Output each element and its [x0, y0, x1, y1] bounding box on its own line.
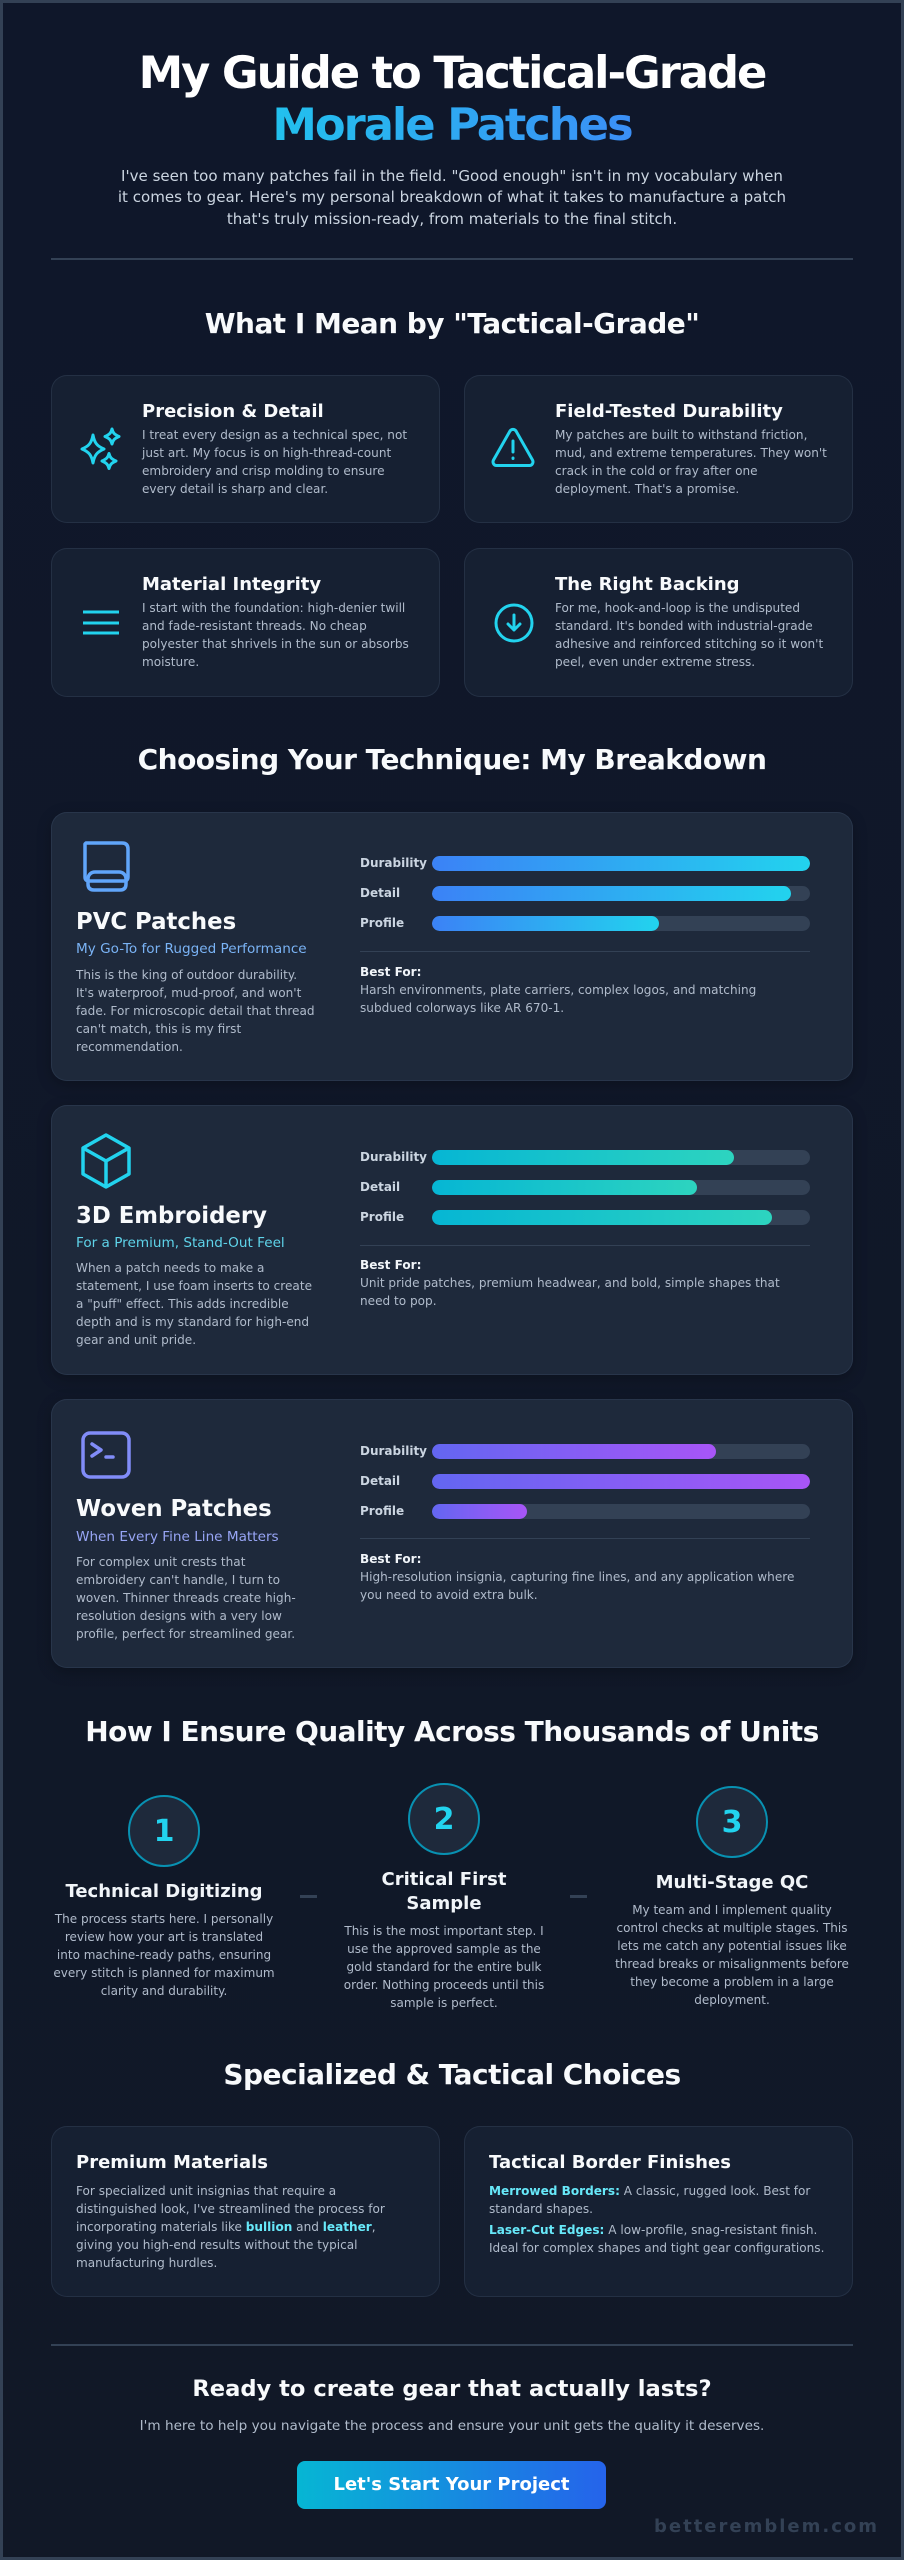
text: standard shapes.	[489, 2202, 593, 2216]
text	[555, 574, 823, 669]
panel: tactical border finishes	[464, 2126, 853, 2297]
text	[555, 401, 827, 496]
step text	[344, 1924, 544, 2010]
description: woven. Thinner threads create high-	[76, 1591, 296, 1605]
step text: My team and I implement quality	[632, 1903, 832, 1917]
step text	[53, 1912, 275, 1998]
text: just art. My focus is on high-thread-count	[142, 446, 391, 460]
best for: Unit pride patches, premium headwear, and bold, simple shapes that	[360, 1276, 780, 1290]
connector	[570, 1895, 587, 1898]
icon: cube	[81, 1133, 131, 1189]
icon: PVC	[83, 841, 130, 892]
panel: 3D embroidery	[51, 1105, 853, 1375]
title	[139, 46, 766, 151]
panel: material integrity	[51, 548, 440, 697]
description	[76, 968, 315, 1054]
bar chart: Durability	[360, 1444, 427, 1458]
step text: review how your art is translated	[65, 1930, 263, 1944]
description: embroidery can't handle, I turn to	[76, 1573, 280, 1587]
intro paragraph	[118, 167, 786, 228]
step text: lets me catch any potential issues like	[617, 1939, 847, 1953]
bar chart: Detail	[360, 1474, 400, 1488]
bar chart	[360, 1444, 810, 1519]
step title	[382, 1869, 506, 1914]
intro paragraph: that's truly mission-ready, from materials to the final stitch.	[227, 210, 677, 228]
text: peel, even under extreme stress.	[555, 655, 755, 669]
description: It's waterproof, mud-proof, and won't	[76, 986, 301, 1000]
bar chart: Profile	[360, 1504, 404, 1518]
step text: control checks at multiple stages. This	[616, 1921, 848, 1935]
intro paragraph: I've seen too many patches fail in the field. "Good enough" isn't in my vocabulary when	[121, 167, 783, 185]
text: polyester that shrivels in the sun or absorbs	[142, 637, 409, 651]
panel: PVC patches	[51, 812, 853, 1081]
subtitle: When Every Fine Line Matters	[76, 1529, 279, 1545]
text	[142, 574, 409, 669]
text: crack in the cold or fray after one	[555, 464, 758, 478]
text: For specialized unit insignias that require a	[76, 2184, 336, 2198]
description: depth and is my standard for high-end	[76, 1315, 309, 1329]
text: adhesive and reinforced stitching so it won't	[555, 637, 823, 651]
description: This is the king of outdoor durability.	[76, 968, 297, 982]
text	[142, 401, 407, 496]
text: I start with the foundation: high-denier twill	[142, 601, 405, 615]
text: Laser-Cut Edges: A low-profile, snag-resistant finish.	[489, 2223, 817, 2237]
text: and fade-resistant threads. No cheap	[142, 619, 367, 633]
step text	[615, 1903, 849, 2007]
best for	[360, 1258, 780, 1308]
step text: The process starts here. I personally	[55, 1912, 273, 1926]
number badge	[128, 1795, 200, 1867]
description: can't match, this is my first	[76, 1022, 241, 1036]
text: deployment. That's a promise.	[555, 482, 739, 496]
text: manufacturing hurdles.	[76, 2256, 217, 2270]
text: Ideal for complex shapes and tight gear configurations.	[489, 2241, 824, 2255]
best for: High-resolution insignia, capturing fine lines, and any application where	[360, 1570, 794, 1584]
number badge	[408, 1783, 480, 1855]
text	[489, 2152, 824, 2255]
number badge: 1	[154, 1814, 174, 1849]
icon: terminal	[81, 1431, 131, 1479]
bar chart	[360, 856, 810, 931]
panel: the right backing	[464, 548, 853, 697]
title: 3D Embroidery	[76, 1203, 267, 1229]
step text: sample is perfect.	[390, 1996, 498, 2010]
text: distinguished look, I've streamlined the process for	[76, 2202, 385, 2216]
description: a "puff" effect. This adds incredible	[76, 1297, 289, 1311]
text: My patches are built to withstand friction,	[555, 428, 807, 442]
number badge	[696, 1786, 768, 1858]
text: giving you high-end results without the typical	[76, 2238, 358, 2252]
step 2	[344, 1783, 544, 2010]
title: Morale Patches	[272, 98, 632, 151]
text: embroidery and crisp molding to ensure	[142, 464, 385, 478]
description: For complex unit crests that	[76, 1555, 245, 1569]
bar chart: Profile	[360, 916, 404, 930]
text: Material Integrity	[142, 574, 321, 595]
bar chart: Detail	[360, 1180, 400, 1194]
title: My Guide to Tactical-Grade	[139, 46, 765, 99]
panel: woven patches	[51, 1399, 853, 1668]
best for	[360, 965, 756, 1015]
title: Woven Patches	[76, 1496, 272, 1522]
divider	[51, 2344, 853, 2346]
best for: you need to avoid extra bulk.	[360, 1588, 538, 1602]
icon: warning triangle	[492, 428, 534, 467]
heading: quality: How I Ensure Quality Across Thousands of Units	[85, 1715, 819, 1748]
heading: tactical-grade: What I Mean by "Tactical-Grade"	[205, 307, 699, 340]
text: Tactical Border Finishes	[489, 2152, 731, 2173]
description	[76, 1261, 312, 1347]
text: Field-Tested Durability	[555, 401, 783, 422]
number badge: 2	[434, 1802, 454, 1837]
best for	[360, 1552, 794, 1602]
step title: Multi-Stage QC	[656, 1872, 808, 1893]
icon: three lines	[83, 610, 119, 634]
text: incorporating materials like bullion and leather,	[76, 2220, 376, 2234]
bar chart: Durability	[360, 856, 427, 870]
subtitle: My Go-To for Rugged Performance	[76, 941, 307, 957]
number badge: 3	[722, 1805, 742, 1840]
text: Merrowed Borders: A classic, rugged look. Best for	[489, 2184, 810, 2198]
connector	[300, 1895, 317, 1898]
step text: they become a problem in a large	[630, 1975, 834, 1989]
step text: thread breaks or misalignments before	[615, 1957, 849, 1971]
button	[297, 2461, 606, 2509]
panel: precision and detail	[51, 375, 440, 523]
text: moisture.	[142, 655, 199, 669]
panel: premium materials	[51, 2126, 440, 2297]
panel: field-tested durability	[464, 375, 853, 523]
description: recommendation.	[76, 1040, 183, 1054]
step 3	[615, 1786, 849, 2007]
subtitle: For a Premium, Stand-Out Feel	[76, 1235, 285, 1251]
icon: sparkles	[80, 428, 120, 470]
bar chart: Profile	[360, 1210, 404, 1224]
call to action text: I'm here to help you navigate the process and ensure your unit gets the quality it deserves.	[140, 2418, 764, 2434]
description: statement, I use foam inserts to create	[76, 1279, 312, 1293]
step text: into machine-ready paths, ensuring	[57, 1948, 271, 1962]
icon: down arrow circle	[494, 604, 534, 642]
text: standard. It's bonded with industrial-grade	[555, 619, 813, 633]
step text: clarity and durability.	[101, 1984, 227, 1998]
text: every detail is sharp and clear.	[142, 482, 328, 496]
description: resolution designs with a very low	[76, 1609, 282, 1623]
description: When a patch needs to make a	[76, 1261, 264, 1275]
best for: need to pop.	[360, 1294, 437, 1308]
step text: deployment.	[694, 1993, 770, 2007]
watermark: betteremblem.com	[654, 2516, 879, 2537]
bar chart: Durability	[360, 1150, 427, 1164]
best for: Best For:	[360, 1552, 421, 1566]
description: profile, perfect for streamlined gear.	[76, 1627, 295, 1641]
description: gear and unit pride.	[76, 1333, 196, 1347]
step text: This is the most important step. I	[344, 1924, 544, 1938]
step text: gold standard for the entire bulk	[346, 1960, 542, 1974]
text: For me, hook-and-loop is the undisputed	[555, 601, 800, 615]
best for: Best For:	[360, 1258, 421, 1272]
button: Let's Start Your Project	[333, 2474, 570, 2495]
bar chart	[360, 1150, 810, 1225]
text	[76, 2152, 385, 2270]
divider	[51, 258, 853, 260]
step text: every stitch is planned for maximum	[53, 1966, 275, 1980]
intro paragraph: it comes to gear. Here's my personal breakdown of what it takes to manufacture a patch	[118, 188, 786, 206]
title: PVC Patches	[76, 909, 236, 935]
step text: order. Nothing proceeds until this	[344, 1978, 544, 1992]
description: fade. For microscopic detail that thread	[76, 1004, 315, 1018]
step title: Technical Digitizing	[65, 1881, 263, 1902]
heading: specialized: Specialized & Tactical Choices	[223, 2058, 681, 2091]
description	[76, 1555, 296, 1641]
text: mud, and extreme temperatures. They won't	[555, 446, 827, 460]
step title: Critical First	[382, 1869, 506, 1890]
best for: subdued colorways like AR 670-1.	[360, 1001, 564, 1015]
step 1	[53, 1795, 275, 1998]
text: I treat every design as a technical spec, not	[142, 428, 407, 442]
best for: Harsh environments, plate carriers, complex logos, and matching	[360, 983, 756, 997]
text: The Right Backing	[555, 574, 740, 595]
best for: Best For:	[360, 965, 421, 979]
text: Precision & Detail	[142, 401, 324, 422]
heading: technique: Choosing Your Technique: My Breakdown	[138, 743, 766, 776]
bar chart: Detail	[360, 886, 400, 900]
call to action heading: Ready to create gear that actually lasts?	[192, 2376, 712, 2402]
step title: Sample	[406, 1893, 482, 1914]
step text: use the approved sample as the	[347, 1942, 541, 1956]
text: Premium Materials	[76, 2152, 268, 2173]
